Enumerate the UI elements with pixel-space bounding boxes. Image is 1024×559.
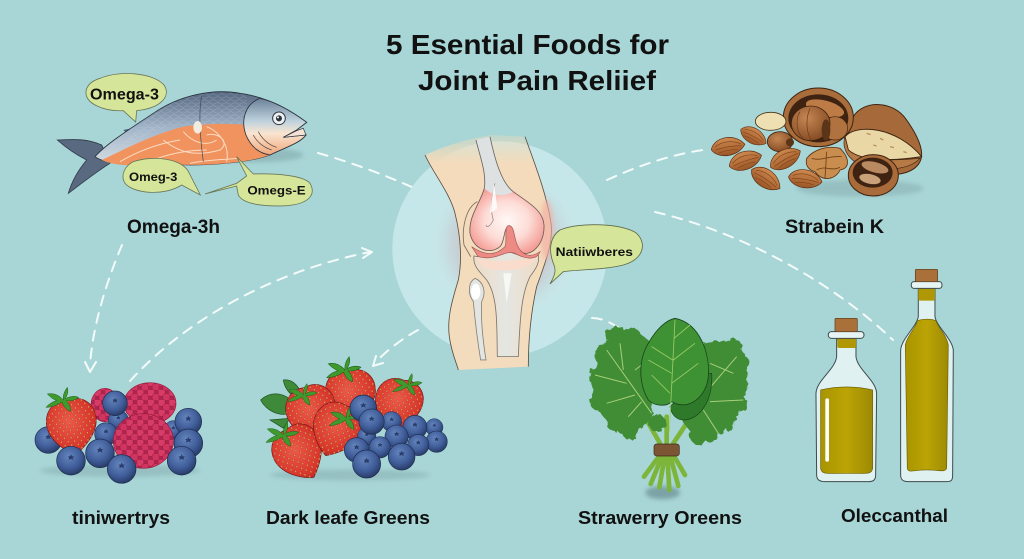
almonds — [710, 122, 824, 196]
small half shell — [848, 155, 898, 196]
pink skin flush — [540, 200, 553, 260]
panel: olive oil bottles — [816, 269, 953, 482]
bunch shadow — [645, 486, 680, 499]
berries shadow — [40, 465, 200, 477]
spinach leaf — [641, 318, 708, 432]
pile shadow — [270, 470, 430, 480]
front blueberries — [57, 391, 203, 483]
lower spinach leaf — [670, 373, 712, 420]
small raspberry — [91, 388, 119, 422]
fish eye — [273, 112, 285, 125]
stems — [644, 417, 687, 490]
pale almond — [755, 112, 786, 130]
title: Joint Pain Reliief — [418, 65, 657, 96]
label: Strabein K: Strabein K — [785, 217, 884, 238]
panel: nuts — [710, 88, 923, 197]
label: Oleccanthal: Oleccanthal — [841, 506, 948, 526]
salmon flesh — [102, 124, 270, 165]
kale leaf right — [680, 339, 750, 445]
whole walnut shell — [849, 105, 922, 175]
small bottle — [816, 318, 877, 482]
leg outline — [425, 135, 551, 370]
label: Omega-3h: Omega-3h — [127, 217, 220, 238]
raspberries — [113, 383, 176, 468]
femur bone — [470, 188, 544, 253]
title: 5 Esential Foods for — [386, 29, 669, 60]
tall bottle — [901, 269, 953, 482]
panel: mixed berries left — [35, 383, 203, 483]
large half shell — [783, 88, 853, 147]
back blueberries — [35, 408, 202, 453]
glow circle behind knee — [392, 141, 608, 357]
callout: Omegs-E — [205, 157, 312, 206]
title — [386, 29, 669, 96]
callout: Omegs-E: Omegs-E — [247, 183, 306, 197]
inflammation glow — [448, 187, 562, 300]
callout: Omeg-3: Omeg-3 — [129, 170, 178, 184]
callout: Omega-3: Omega-3 — [90, 86, 159, 103]
walnut kernel — [806, 147, 847, 179]
hazelnut small — [767, 132, 793, 152]
basil leaves — [261, 380, 303, 428]
dashed arrows connecting foods and knee — [85, 150, 893, 381]
label: Dark leafe Greens: Dark leafe Greens — [266, 508, 430, 528]
dorsal fin — [123, 128, 135, 135]
callout: Omega-3 — [86, 74, 166, 122]
kale leaf left — [589, 326, 666, 440]
meniscus arcs — [463, 202, 477, 257]
fish head — [244, 98, 307, 155]
callout: Omeg-3 — [123, 158, 200, 195]
panel: berries with leaves — [261, 357, 447, 490]
callout: Natiiwberes — [550, 225, 642, 284]
cartilage — [472, 226, 540, 258]
blueberries — [344, 395, 447, 478]
tibia bone — [474, 251, 539, 357]
fibula bone — [469, 278, 486, 360]
label: Strawerry Oreens: Strawerry Oreens — [578, 508, 742, 528]
callout: Natiiwberes: Natiiwberes — [556, 245, 633, 259]
panel: leafy greens — [589, 318, 750, 499]
tail — [57, 140, 110, 193]
panel: knee joint illustration — [392, 135, 642, 370]
strawberries — [322, 367, 377, 427]
fish shadow — [203, 148, 303, 162]
hazelnut — [804, 95, 846, 121]
nuts shadow — [797, 180, 923, 197]
strawberry — [44, 397, 99, 457]
open shell with kernel — [845, 129, 922, 160]
label: tiniwertrys: tiniwertrys — [72, 508, 170, 528]
tie — [654, 444, 679, 456]
fish body — [95, 92, 307, 165]
panel: salmon — [57, 74, 312, 206]
